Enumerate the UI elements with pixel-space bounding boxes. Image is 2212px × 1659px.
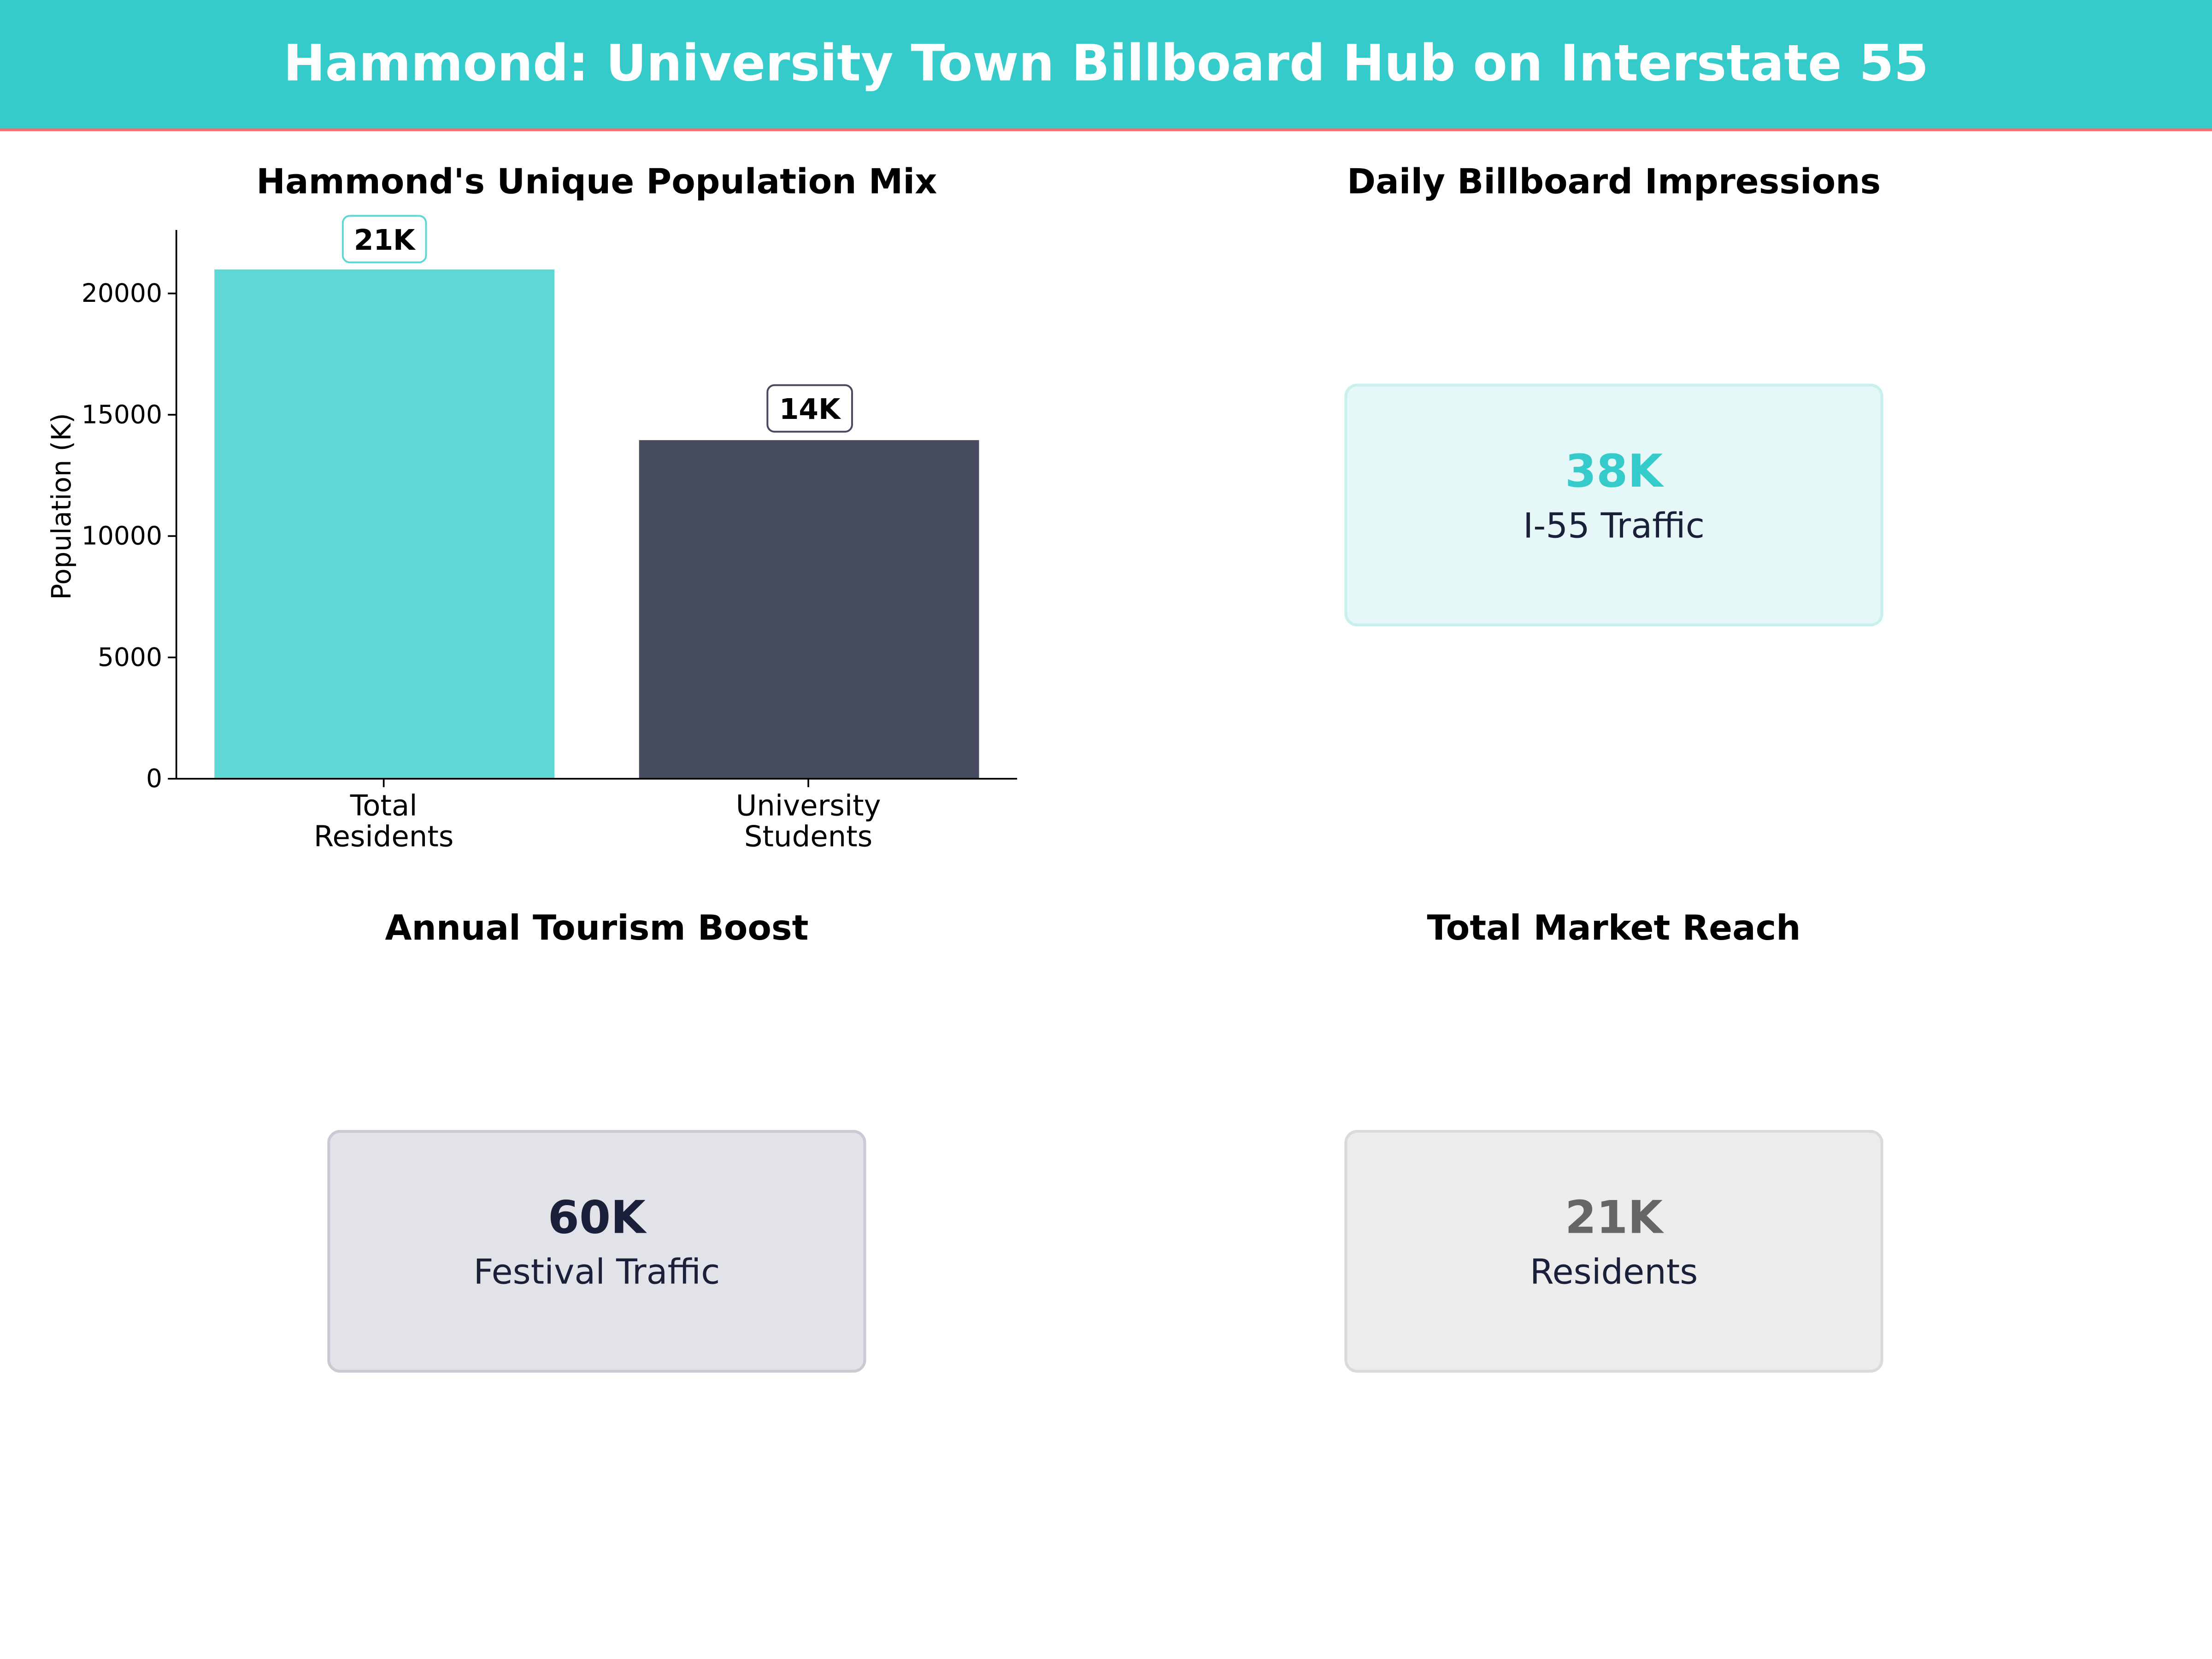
- header banner: [0, 0, 2212, 131]
- stat card: 60K: Festival Traffic: [473, 1252, 720, 1292]
- x tick labels: University: [736, 788, 881, 822]
- title: Hammond: University Town Billboard Hub on Interstate 55: [283, 34, 1929, 92]
- y tick labels: 15000: [82, 400, 162, 429]
- stat card: 60K: [329, 1131, 865, 1371]
- chart title: Hammond's Unique Population Mix: [256, 161, 937, 201]
- stat card: 21K: [1346, 1131, 1882, 1371]
- bar: total residents: [214, 270, 554, 779]
- stat card: 38K: 38K: [1565, 445, 1664, 498]
- value label 14K: 14K: [779, 393, 841, 426]
- x tick labels: Residents: [314, 820, 453, 853]
- stat card: 38K: [1346, 385, 1882, 625]
- heading: Annual Tourism Boost: [385, 907, 808, 948]
- value label 21K: [343, 216, 426, 262]
- stat card: 60K: 60K: [548, 1192, 647, 1244]
- axes: [168, 230, 1017, 787]
- value label 14K: [767, 385, 852, 432]
- heading: Total Market Reach: [1427, 907, 1801, 948]
- panel: daily billboard impressions: [1346, 161, 1882, 625]
- y tick labels: 10000: [82, 521, 162, 551]
- stat card: 21K: 21K: [1565, 1192, 1664, 1244]
- y axis label: Population (K): [46, 413, 77, 600]
- y tick labels: 5000: [98, 642, 162, 672]
- heading: Daily Billboard Impressions: [1347, 161, 1881, 201]
- x tick labels: Total: [350, 788, 418, 822]
- bar: university students: [639, 440, 979, 779]
- panel: population bar chart: [46, 161, 1017, 853]
- stat card: 38K: I-55 Traffic: [1523, 505, 1705, 546]
- y tick labels: 0: [146, 764, 162, 793]
- value label 21K: 21K: [354, 224, 416, 257]
- panel: annual tourism boost: [329, 907, 865, 1371]
- y tick labels: [82, 278, 162, 793]
- stat card: 21K: Residents: [1530, 1252, 1698, 1292]
- panel: total market reach: [1346, 907, 1882, 1371]
- y tick labels: 20000: [82, 278, 162, 308]
- x tick labels: Students: [744, 820, 872, 853]
- x tick labels: [314, 788, 881, 853]
